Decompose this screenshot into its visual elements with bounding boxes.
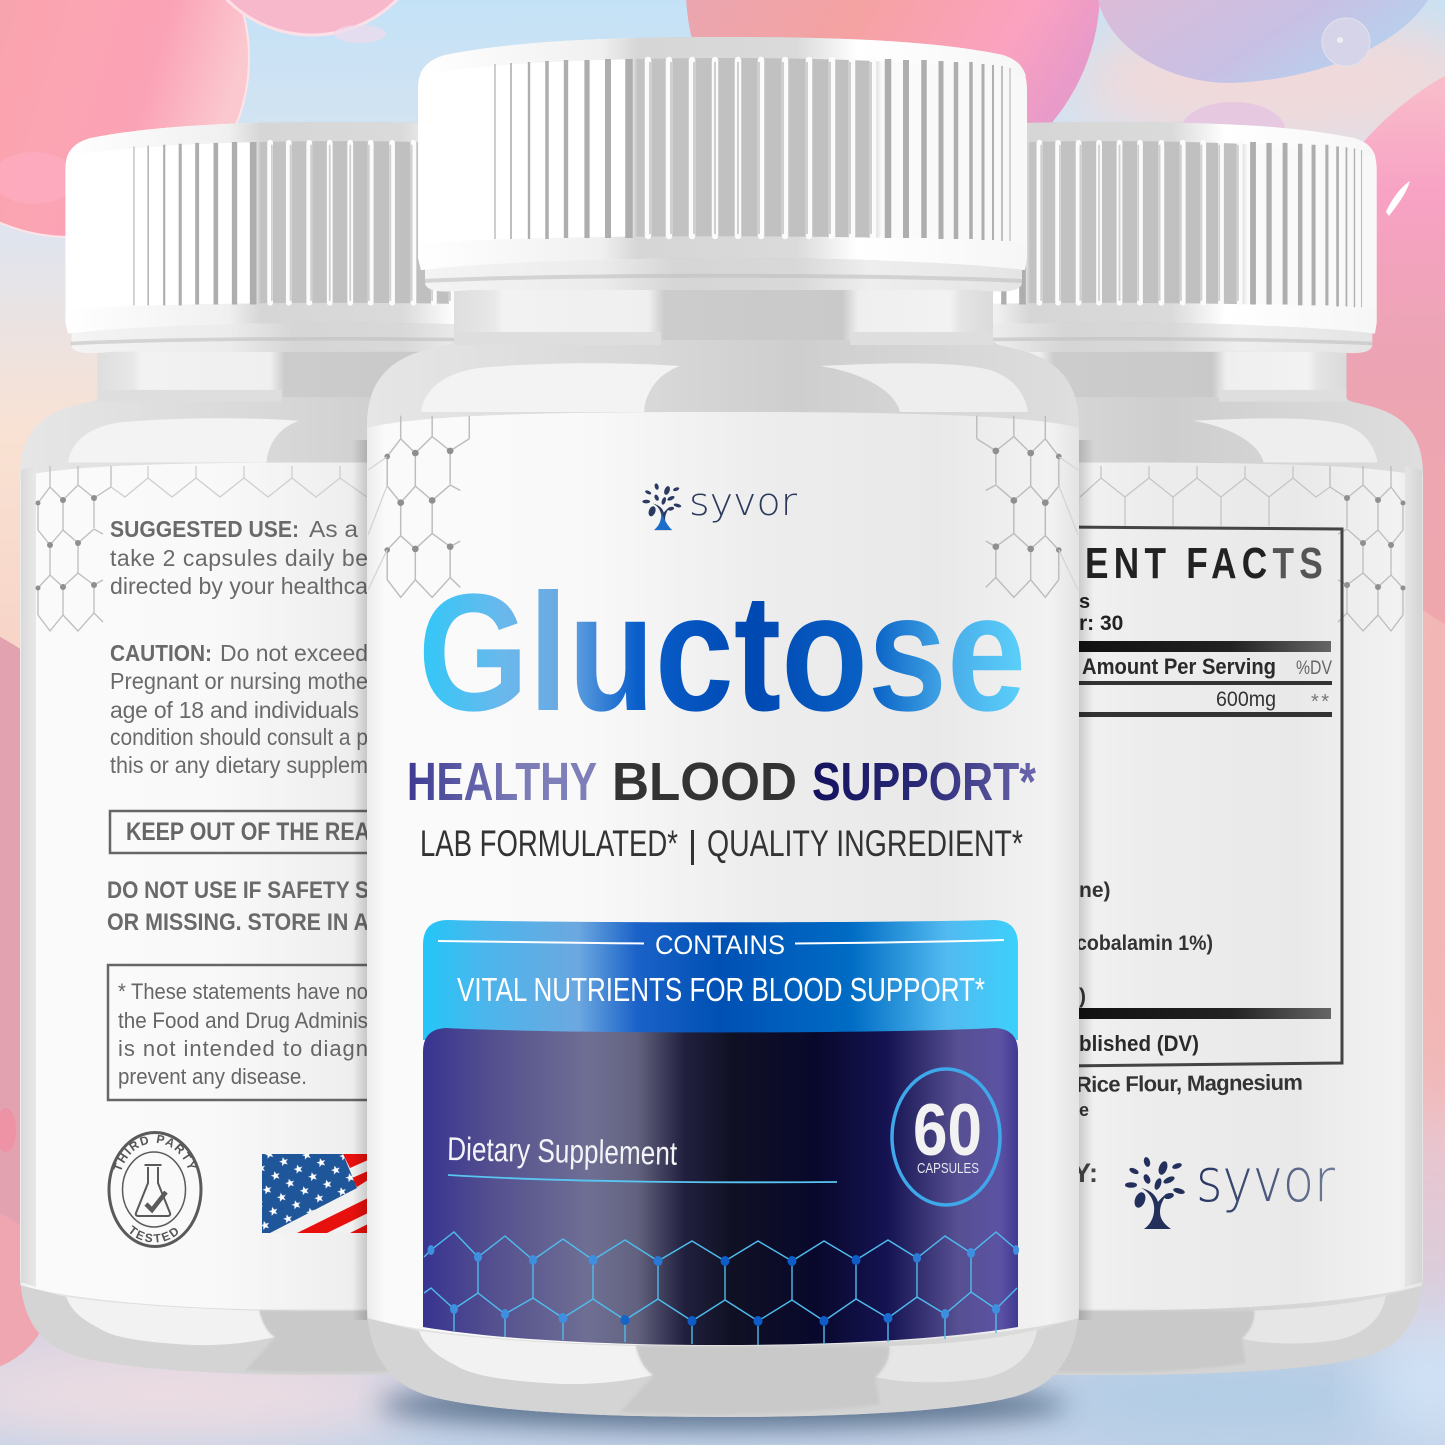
caution text: condition should consult a p: [110, 724, 368, 750]
syvor logo: [642, 480, 797, 530]
icon: third party tested badge: TESTED: [130, 1225, 178, 1242]
right corner hexagons: [977, 416, 1078, 597]
nutrition facts heading: ENT FACTS: [1085, 539, 1328, 588]
nutrition facts panel: ): [1079, 985, 1086, 1008]
60 capsules badge: 60: [913, 1090, 982, 1171]
title: Gluctose: Gluctose: [418, 560, 1026, 746]
underline: [448, 1175, 837, 1182]
suggested use text: directed by your healthca: [110, 573, 368, 599]
suggested use text: take 2 capsules daily be: [110, 545, 368, 571]
rule: [1060, 681, 1332, 685]
band headline: VITAL NUTRIENTS FOR BLOOD SUPPORT*: [457, 971, 985, 1008]
FDA disclaimer box: is not intended to diagn: [118, 1036, 368, 1061]
subtitle: healthy blood support: SUPPORT*: [812, 752, 1036, 812]
icon: third party tested badge: THIRD PARTY: [114, 1134, 196, 1170]
subtitle: healthy blood support: [407, 752, 1036, 812]
syvor logo, back bottle: [1125, 1146, 1335, 1229]
nutrition facts panel: **: [1311, 691, 1329, 713]
keep out of reach box: [110, 811, 380, 853]
amount per serving row: Amount Per Serving: [1082, 654, 1276, 679]
left hexagon decoration: [36, 466, 367, 631]
right bottle side band: [1405, 466, 1422, 1287]
suggested use text: SUGGESTED USE:: [110, 516, 299, 542]
60 capsules badge: CAPSULES: [917, 1160, 979, 1177]
center front bottle: [367, 37, 1079, 1417]
nutrition facts panel: r: 30: [1079, 612, 1123, 635]
left bottle blank: [20, 122, 654, 1375]
shadow of center bottle on back bottles, left: [352, 440, 367, 1320]
FDA disclaimer box: [108, 965, 388, 1100]
tagline: QUALITY INGREDIENT*: [707, 823, 1023, 864]
dietary supplement label: Dietary Supplement: [447, 1130, 678, 1172]
left corner hexagons: [368, 416, 469, 597]
syvor logo: syvor: [689, 480, 797, 524]
nutrition facts panel: cobalamin 1%): [1076, 932, 1213, 955]
right hexagon decoration: [1080, 466, 1406, 631]
nutrition facts panel: [1060, 527, 1342, 1066]
shadow of center bottle on back bottles, right: [1079, 440, 1094, 1320]
ingredient fragments: ne): [1079, 879, 1110, 902]
caution text: this or any dietary supplem: [110, 752, 368, 778]
daily value note: blished (DV): [1079, 1031, 1199, 1056]
other ingredients text: [1073, 1070, 1303, 1188]
safety warning text: OR MISSING. STORE IN A: [107, 909, 369, 936]
FDA disclaimer box: the Food and Drug Adminis: [118, 1008, 368, 1033]
FDA disclaimer box: prevent any disease.: [118, 1064, 307, 1089]
600mg amount: 600mg: [1216, 688, 1276, 711]
tagline: [420, 823, 1023, 865]
safety warning text: [107, 877, 369, 936]
subtitle: healthy blood support: HEALTHY: [407, 752, 597, 812]
icon: american flag: [262, 1154, 420, 1233]
caution text: CAUTION:: [110, 640, 212, 666]
blue contains band: [423, 920, 1018, 1040]
suggested use text: As a: [309, 516, 358, 542]
keep out of reach box: KEEP OUT OF THE REA: [126, 818, 370, 846]
contains label: CONTAINS: [655, 930, 785, 960]
subtitle: healthy blood support: BLOOD: [612, 752, 797, 812]
other ingredients text: e: [1079, 1100, 1089, 1120]
servings text: s: [1079, 591, 1090, 613]
caution text: Do not exceed: [220, 640, 368, 666]
FDA disclaimer box: * These statements have no: [118, 979, 368, 1004]
caution text: [110, 640, 368, 778]
tagline: LAB FORMULATED*: [420, 823, 678, 864]
nutrition facts panel: %DV: [1296, 658, 1332, 679]
hexagon network: [424, 1232, 1019, 1345]
center bottle blank: [367, 37, 1079, 1417]
top thick bar: [1060, 641, 1331, 652]
suggested use text: [110, 516, 368, 599]
other ingredients text: Rice Flour, Magnesium: [1076, 1070, 1303, 1097]
safety warning text: DO NOT USE IF SAFETY S: [107, 877, 369, 904]
dark panel: [423, 1028, 1019, 1345]
60 capsules badge: [892, 1069, 1000, 1205]
right bottle blank: [789, 122, 1423, 1375]
right back bottle: [789, 122, 1423, 1375]
other ingredients text: Y:: [1073, 1158, 1098, 1188]
rule: [1060, 712, 1332, 717]
caution text: age of 18 and individuals: [110, 697, 359, 723]
syvor logo, back bottle: syvor: [1196, 1146, 1335, 1216]
icon: third party tested badge: [108, 1131, 202, 1248]
bottom thick bar: [1060, 1008, 1331, 1019]
left back bottle: [20, 122, 454, 1375]
caution text: Pregnant or nursing mothe: [110, 668, 368, 694]
left bottle side band: [21, 466, 36, 1287]
